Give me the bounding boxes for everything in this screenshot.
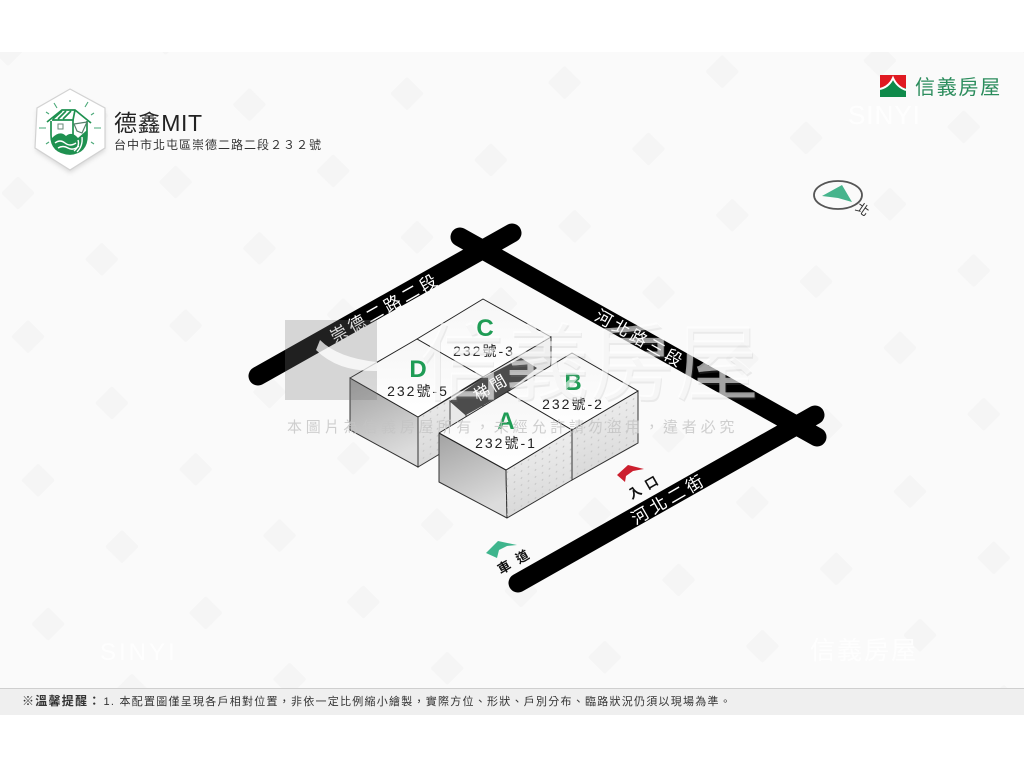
building: A unit: 232號-1 bbox=[475, 435, 537, 451]
watermark: Sinyi: SINYI bbox=[848, 100, 921, 130]
arrow: entrance: 入口 bbox=[626, 470, 666, 502]
building: B unit: 232號-2 bbox=[542, 396, 604, 412]
watermark: Sinyi: 信義房屋 bbox=[810, 637, 918, 665]
building: D unit: 232號-5 bbox=[387, 383, 449, 399]
building: D unit: D bbox=[409, 356, 427, 383]
building: A unit: A bbox=[497, 408, 515, 435]
building: C unit: C bbox=[476, 315, 494, 342]
building: B unit bbox=[507, 353, 638, 480]
address: 台中市北屯區崇德二路二段２３２號 bbox=[114, 137, 322, 152]
building: C unit bbox=[417, 299, 551, 412]
watermark: Sinyi: 信義房屋 bbox=[420, 317, 760, 411]
building: C unit: 232號-3 bbox=[453, 343, 515, 359]
icon: north compass: 北 bbox=[853, 199, 872, 219]
road: 河北路三段: 河北路三段 bbox=[592, 306, 688, 372]
title: project name: 德鑫MIT bbox=[114, 110, 203, 136]
road: 河北路三段 bbox=[460, 237, 817, 437]
watermark: Sinyi: 信義房屋 bbox=[421, 319, 761, 413]
road: 崇德二路二段 bbox=[258, 233, 512, 376]
arrow: driveway: 車道 bbox=[495, 543, 539, 577]
icon: hexagon project logo bbox=[35, 89, 105, 173]
road: 河北二街 bbox=[518, 415, 815, 583]
road: 河北二街: 河北二街 bbox=[628, 470, 710, 528]
stairwell: 梯間: 梯間 bbox=[471, 370, 512, 405]
road: 崇德二路二段: 崇德二路二段 bbox=[327, 270, 443, 347]
building: A unit bbox=[439, 392, 572, 518]
building: B unit: B bbox=[564, 369, 582, 396]
footer notice bbox=[0, 688, 1024, 715]
footer notice: ※溫馨提醒：1. 本配置圖僅呈現各戶相對位置，非依一定比例縮小繪製，實際方位、形狀、戶別分布、臨路狀況仍須以現場為準。 bbox=[22, 693, 732, 708]
watermark: Sinyi bbox=[100, 100, 921, 666]
watermark: Sinyi: 本圖片為信義房屋所有，未經允許請勿盜用，違者必究 bbox=[287, 419, 738, 436]
icon: north compass bbox=[814, 181, 872, 219]
stairwell: 梯間 bbox=[450, 358, 537, 440]
building: D unit bbox=[350, 339, 483, 467]
logo: Sinyi Realty: 信義房屋 bbox=[915, 76, 1002, 99]
logo: Sinyi Realty bbox=[880, 75, 1002, 99]
watermark: Sinyi: SINYI bbox=[100, 639, 178, 666]
